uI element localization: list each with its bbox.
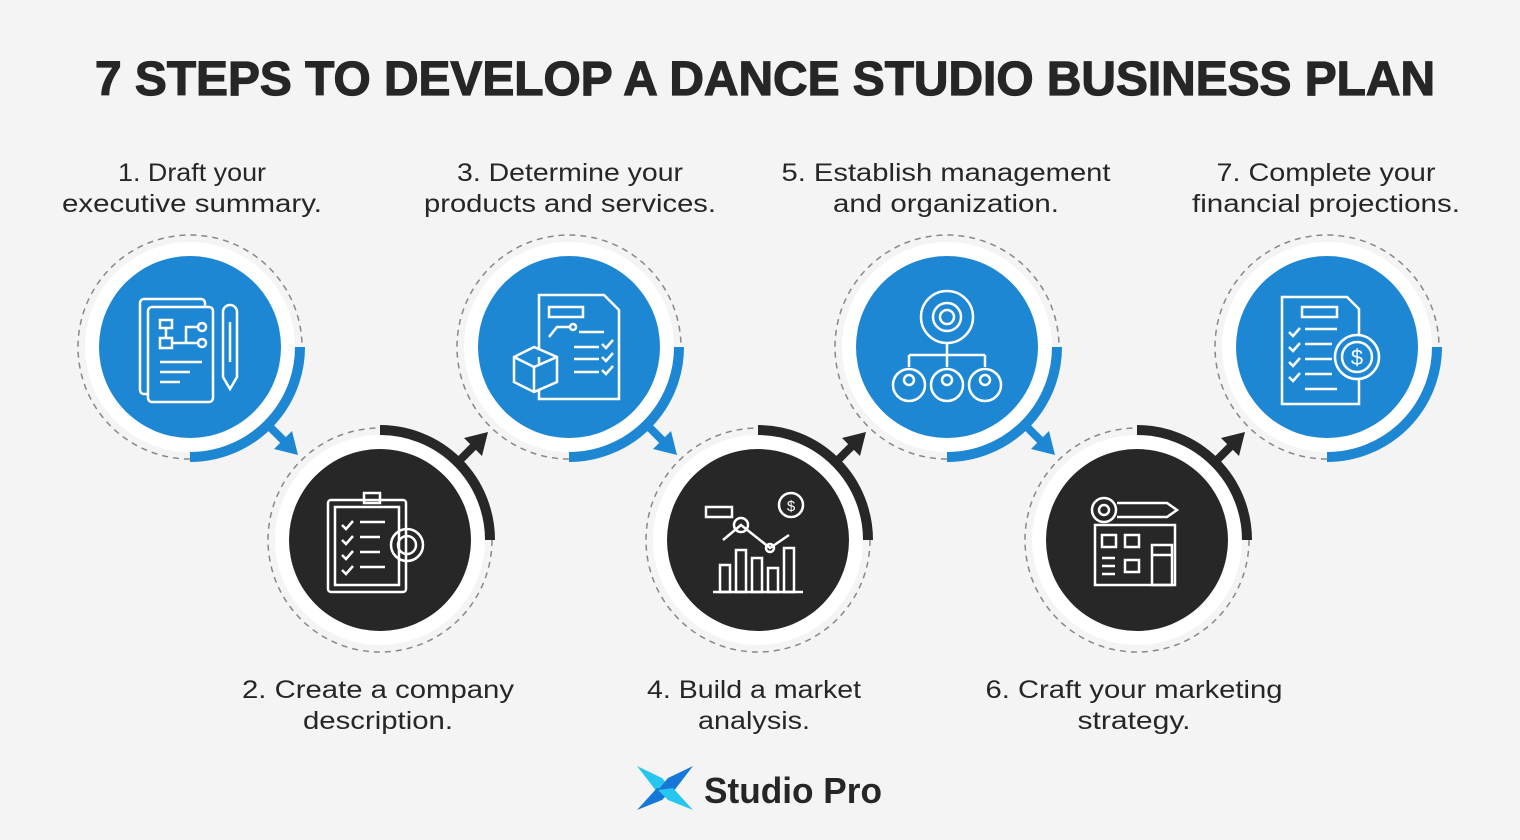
label 6: 6. Craft your marketing [986,676,1282,704]
icon: logo mark [637,766,693,810]
icon: market chart [706,493,803,592]
step 2 [268,428,492,652]
label 3: products and services. [424,190,716,218]
label 2: 2. Create a company [242,676,515,704]
icon: financial document [1282,297,1379,404]
icon: market chart: $ [787,498,796,515]
icon: strategy board [1092,498,1177,585]
icon: financial document: $ [1351,345,1363,370]
icon: clipboard gear [328,493,423,592]
label 3: 3. Determine your [457,159,683,187]
logo: Studio Pro [704,770,882,811]
label 4: 4. Build a market [647,676,861,704]
logo [637,766,882,811]
step 7 [1215,235,1439,459]
icon: organization [893,291,1001,401]
label 5: 5. Establish management [782,159,1111,187]
step 5 [835,235,1059,459]
icon: document flowchart [140,299,237,402]
step 4 [646,428,870,652]
label 7: 7. Complete your [1216,159,1436,187]
label 7: financial projections. [1192,190,1460,218]
label 1: executive summary. [62,190,322,218]
step 6 [1025,428,1249,652]
title: 7 STEPS TO DEVELOP A DANCE STUDIO BUSINESS PLAN [95,53,1435,106]
label 1: 1. Draft your [118,159,266,187]
label 2: description. [303,707,453,735]
step 3 [457,235,681,459]
label 5: and organization. [833,190,1059,218]
label 4: analysis. [698,707,810,735]
icon: product document [514,295,619,399]
step 1 [78,235,302,459]
label 6: strategy. [1078,707,1190,735]
